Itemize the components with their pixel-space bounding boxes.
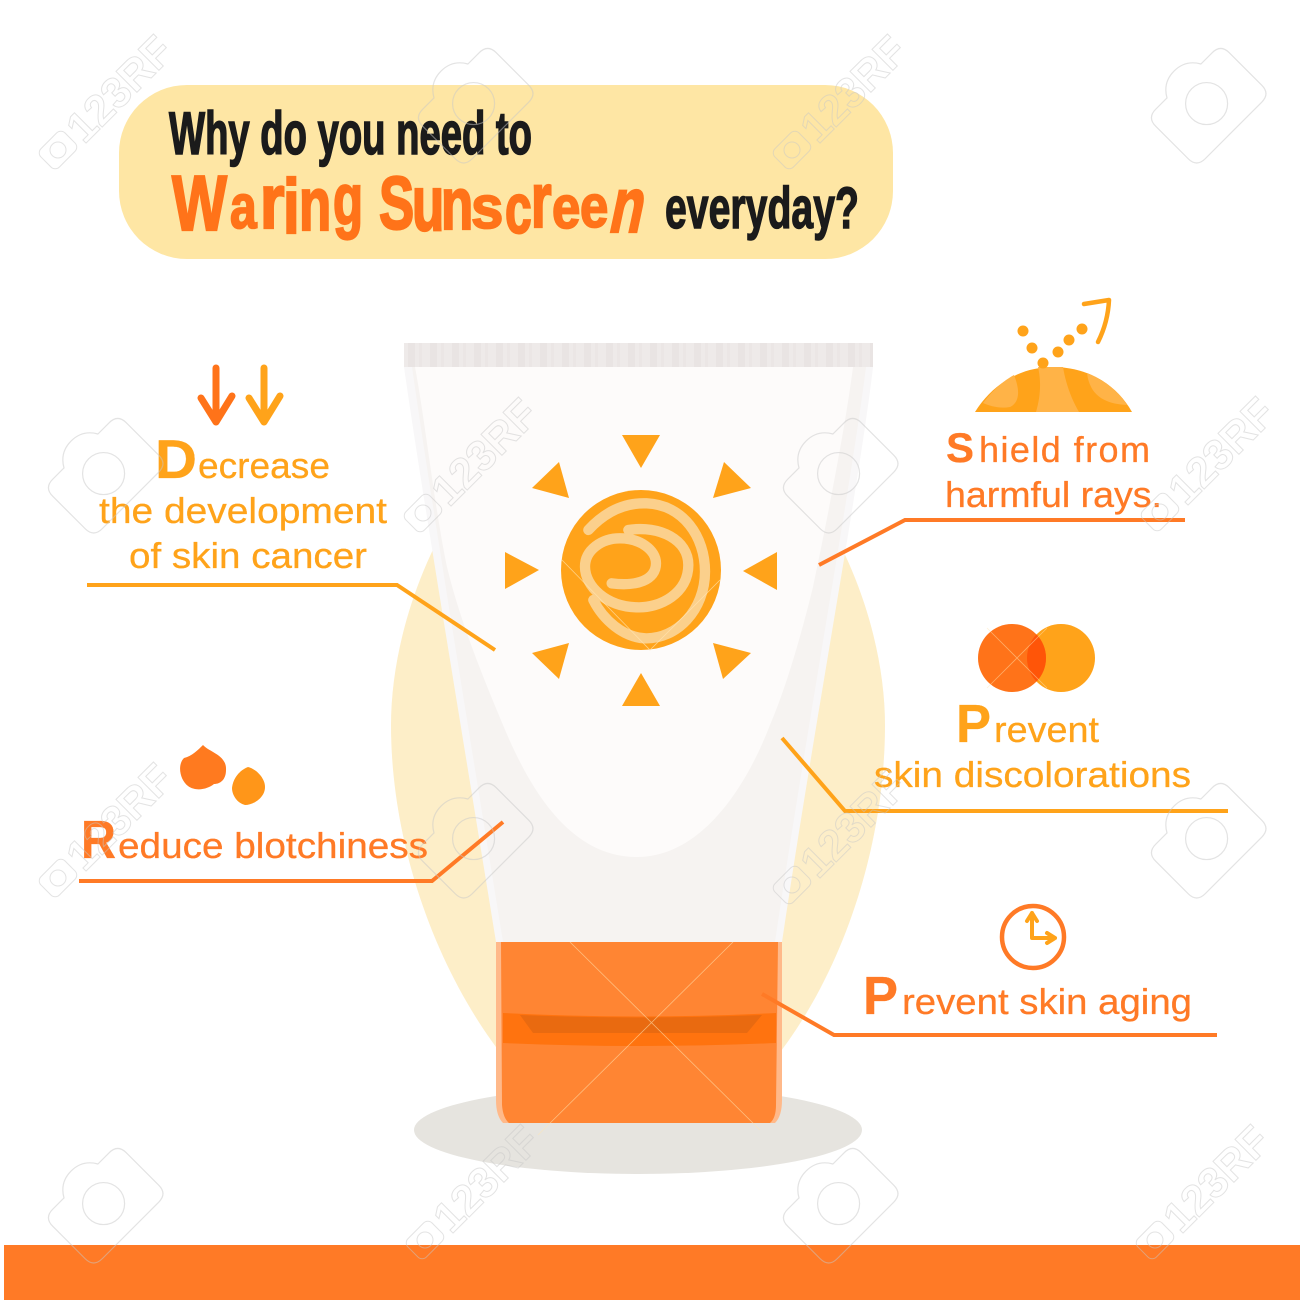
title highlight: Waring Sunscreen: n <box>441 162 473 245</box>
leader line <box>87 585 495 650</box>
callout text <box>874 694 1191 795</box>
yellow glow behind tube <box>391 380 885 1065</box>
callout: prevent skin aging <box>762 906 1217 1035</box>
callout text: harmful rays. <box>945 474 1162 515</box>
leader line <box>79 822 503 881</box>
title line 1: Why do you need to <box>169 100 532 167</box>
sun logo <box>505 435 777 706</box>
sun swirl <box>585 503 705 638</box>
title highlight: Waring Sunscreen: s <box>471 173 503 241</box>
leader line <box>782 738 1228 811</box>
icon: overlapping circles <box>978 624 1095 692</box>
callout text: D <box>155 428 197 490</box>
callout text: revent <box>994 709 1099 750</box>
callout text <box>863 966 1192 1026</box>
tube highlight <box>415 367 853 857</box>
leader line <box>819 520 1185 565</box>
callout: prevent skin discolorations <box>782 624 1228 811</box>
title highlight: Waring Sunscreen: r <box>260 158 285 244</box>
callout text: hield from <box>979 429 1150 470</box>
callout text: skin discolorations <box>874 754 1191 795</box>
tube illustration <box>391 343 885 1174</box>
icon: dome with bouncing rays <box>975 300 1132 412</box>
title highlight: Waring Sunscreen: n <box>299 162 331 246</box>
callout text <box>945 424 1162 515</box>
callout: decrease skin cancer <box>87 368 495 650</box>
sun rays <box>505 435 777 706</box>
tube body <box>404 367 873 942</box>
banner pill <box>119 85 893 259</box>
callout text: R <box>81 810 116 870</box>
callout: reduce blotchiness <box>79 745 503 881</box>
icon: blotches <box>180 745 265 805</box>
callout text <box>99 428 387 576</box>
title word: everyday: everyday? <box>665 176 859 241</box>
leader line <box>762 994 1217 1035</box>
tube cap <box>496 942 782 1135</box>
title highlight: Waring Sunscreen: e <box>552 174 580 241</box>
icon: clock <box>1002 906 1064 968</box>
callout text: S <box>946 424 974 471</box>
title highlight: Waring Sunscreen: g <box>333 160 363 240</box>
title highlight: Waring Sunscreen: S <box>379 161 414 245</box>
title highlight: Waring Sunscreen: e <box>580 173 608 240</box>
footer bar <box>4 1245 1300 1300</box>
title highlight: Waring Sunscreen: W <box>172 160 227 247</box>
callout text: P <box>863 966 898 1026</box>
title highlight: Waring Sunscreen <box>172 158 655 250</box>
title highlight: Waring Sunscreen: r <box>531 158 552 245</box>
title highlight: Waring Sunscreen: n <box>603 162 655 249</box>
sun disc <box>561 490 721 650</box>
callout text: ecrease <box>198 445 330 486</box>
callout text: P <box>956 694 991 754</box>
callout text: of skin cancer <box>129 535 367 576</box>
title highlight: Waring Sunscreen: i <box>283 164 300 250</box>
title highlight: Waring Sunscreen: a <box>230 172 258 241</box>
icon: down arrows <box>201 368 280 422</box>
tube crimp <box>404 343 873 367</box>
callout text: revent skin aging <box>902 981 1192 1022</box>
callout text: the development <box>99 490 387 531</box>
callout text <box>81 810 428 870</box>
callout: shield from harmful rays <box>819 300 1185 565</box>
title highlight: Waring Sunscreen: c <box>505 169 532 248</box>
callout text: educe blotchiness <box>118 825 428 866</box>
title highlight: Waring Sunscreen: u <box>412 161 444 248</box>
title banner <box>119 85 893 259</box>
ground shadow <box>414 1086 862 1174</box>
